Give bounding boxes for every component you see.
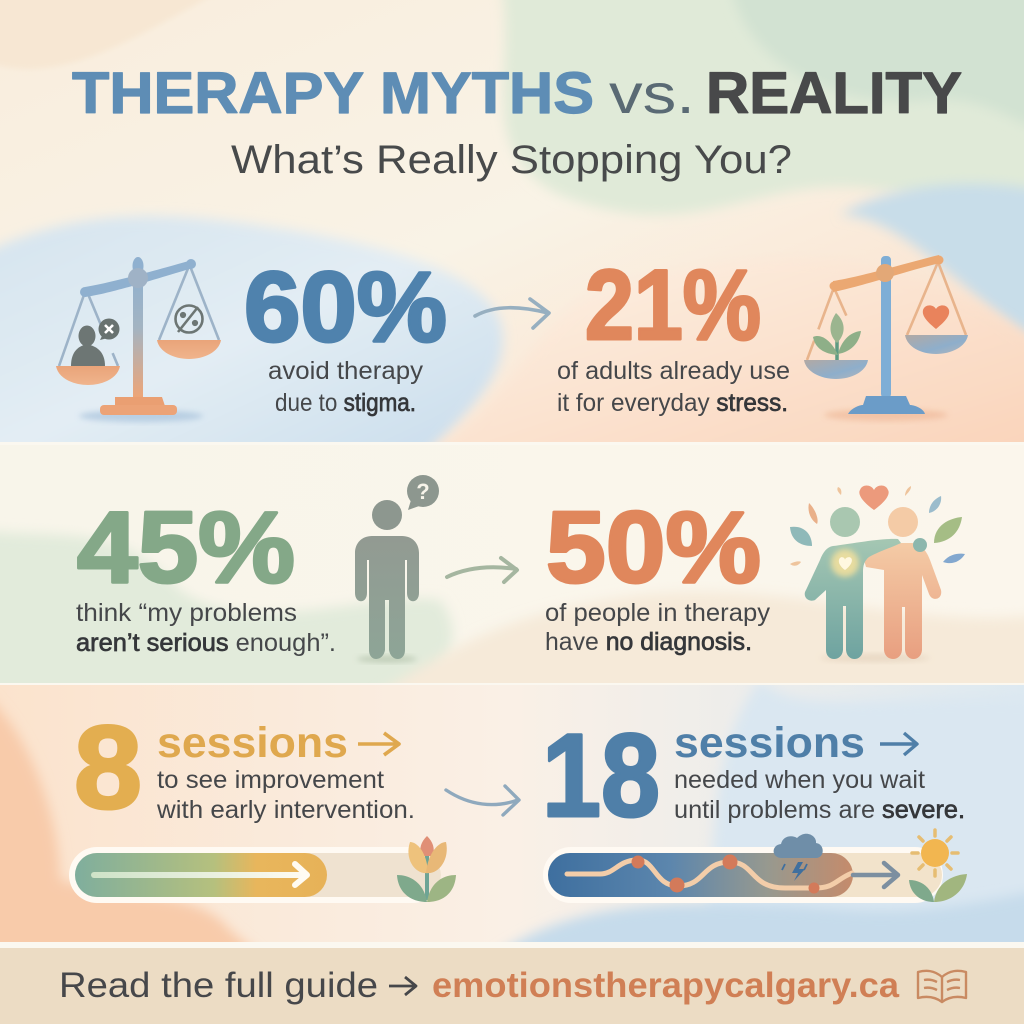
icons: surrounding leaves [790,486,965,566]
text: 21 percent description: it for everyday stress. [557,389,788,417]
arrow to sun [853,863,898,887]
stat: 8 sessions number: 8 [74,702,142,834]
icon: question speech bubble [407,475,439,510]
text: 60 percent description [268,357,424,417]
winding path [567,860,852,888]
progress bar: early intervention [69,836,456,903]
stat: 50 percent: 50% [546,492,761,604]
text: 45 percent description: think “my problems [76,599,297,627]
text: 50 percent description [545,599,771,656]
text: 60 percent description: due to stigma. [275,389,416,417]
arrow: 45 percent to 50 percent [447,558,517,582]
setback markers [632,854,820,894]
icon: open book [918,971,966,1002]
text: 45 percent description: aren’t serious enough”. [76,629,336,657]
progress bar: delayed intervention [543,830,967,903]
text: 18 sessions description [674,766,965,824]
stat: 60 percent: 60% [244,251,447,362]
panel: bottom section background [0,680,1024,960]
text: 8 sessions description [156,766,415,824]
title: REALITY [706,61,962,126]
text: 8 sessions description: with early intervention. [156,796,415,824]
stat: 18 sessions number: 18 [542,710,660,842]
stat: 45 percent: 45% [77,492,295,604]
arrow: 60 percent to 21 percent [475,299,549,328]
icon: questioning person [355,475,439,662]
icon: x speech bubble [98,318,120,340]
icon: person silhouette [71,326,105,366]
icon: no percent symbol [176,306,202,332]
icon: myth scale with stigma [56,257,221,422]
icon: sun with leaves [909,830,967,902]
text: 50 percent description: of people in therapy [545,599,771,627]
title: THERAPY MYTHS [72,61,594,126]
icon: two supportive figures [790,486,965,662]
arrow: footer guide arrow [389,977,416,995]
icon: tulip [397,836,456,902]
icon: reality scale with plant and heart [804,255,968,421]
text: 45 percent description [76,599,336,657]
stat: 21 percent: 21% [585,249,761,360]
hand on shoulder [913,538,927,552]
footer: read the full guide: Read the full guide [59,966,378,1005]
text: 60 percent description: avoid therapy [268,357,424,385]
text: 8 sessions description: to see improvement [157,766,384,794]
text: 50 percent description: have no diagnosis. [545,628,752,656]
heading: sessions with arrow, amber: sessions [157,719,348,767]
icon: heart above figures [859,486,889,510]
icon: storm cloud [774,834,823,881]
heading: sessions with arrow, blue: sessions [674,719,865,767]
text: 18 sessions description: needed when you wait [674,766,925,794]
arrow: 8 sessions to 18 sessions [446,786,519,815]
title [72,61,962,126]
panel: footer [0,948,1024,1024]
icon: heart [923,305,949,329]
icon: question speech bubble: ? [416,479,430,504]
panel: middle section background [0,526,1024,683]
text: 21 percent description [557,357,790,417]
panel: top section background [0,0,1024,460]
text: 21 percent description: of adults already use [557,357,790,385]
footer: website link: emotionstherapycalgary.ca [432,966,900,1005]
title: vs. [609,62,695,125]
icon: glowing heart [831,549,859,577]
subtitle: What’s Really Stopping You? [231,138,792,182]
icon: sprout [813,313,861,360]
text: 18 sessions description: until problems are severe. [674,796,965,824]
